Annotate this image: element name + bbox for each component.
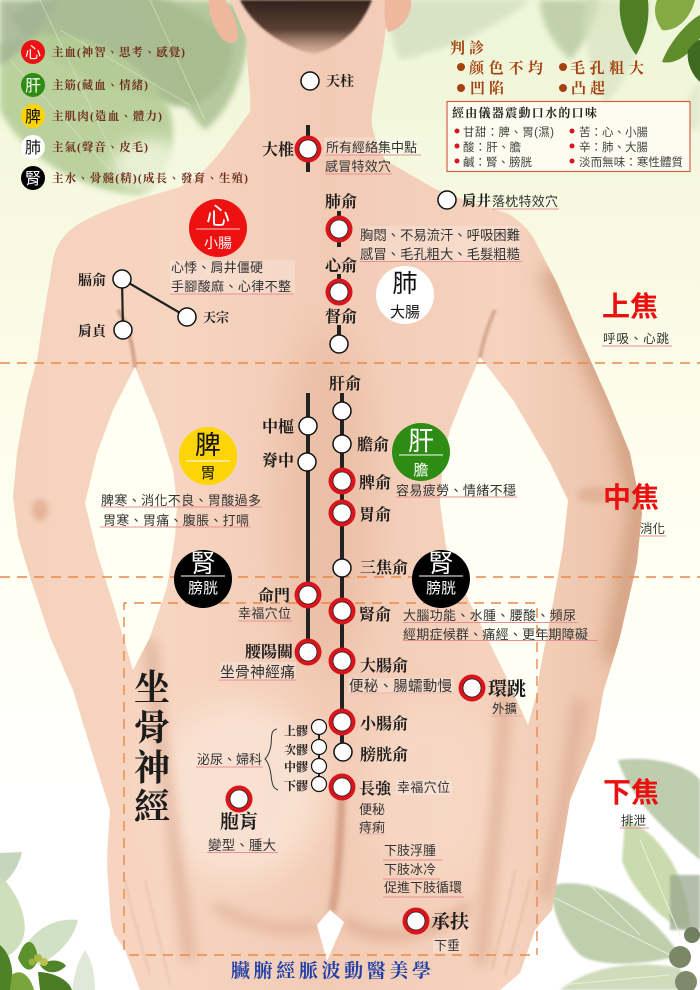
point: Feishu: 肺俞 <box>325 192 357 211</box>
point: Jianjing: 落枕特效穴 <box>492 194 558 209</box>
text: Dazhui notes: 感冒特效穴 <box>325 159 391 174</box>
sacral points: 下髎 <box>284 778 308 793</box>
point: Tianzhu: 天柱 <box>326 73 354 90</box>
text: Changqiang notes: 便秘 <box>359 802 385 817</box>
saliva taste box: 鹹：腎、膀胱 <box>463 155 532 169</box>
saliva taste box: 淡而無味：寒性體質 <box>579 155 683 169</box>
text: heart notes <box>170 260 295 294</box>
text: spleen notes <box>100 493 262 528</box>
text: spleen notes: 脾寒、消化不良、胃酸過多 <box>101 493 261 508</box>
point: Weishu: 胃俞 <box>359 505 391 524</box>
sacral points <box>284 720 326 793</box>
point: Jianzhen <box>78 321 132 340</box>
organ badge: lung / large intestine: 大腸 <box>390 301 420 322</box>
point: Pishu <box>328 468 391 494</box>
diagnosis list: 颜色不均 <box>469 59 543 77</box>
point: Ganshu: 肝俞 <box>329 374 361 393</box>
organ badge: heart / small intestine: 心 <box>206 196 230 231</box>
point: Jianjing <box>438 191 559 210</box>
organ badge: liver / gallbladder <box>392 421 450 481</box>
text: Dazhui notes <box>324 137 421 174</box>
saliva taste box: 苦：心、小腸 <box>579 126 648 139</box>
organ badge: heart / small intestine <box>189 196 247 257</box>
upper jiao label: 呼吸、心跳 <box>603 332 669 346</box>
text: Yaoyangguan note: 坐骨神經痛 <box>220 664 295 681</box>
point: Weishu <box>328 500 391 526</box>
organ badge: spleen / stomach: 胃 <box>200 462 216 483</box>
point: Geshu: 膈俞 <box>78 272 106 289</box>
middle jiao label <box>603 482 666 536</box>
point: Mingmen <box>258 582 322 608</box>
point: Yaoyangguan: 腰陽關 <box>245 643 293 661</box>
point: Pishu: 脾俞 <box>359 473 391 492</box>
text: Dachangshu note: 便秘、腸蠕動慢 <box>349 678 452 695</box>
point: Sanjiaoshu <box>333 558 408 577</box>
bracket: sacral points <box>265 729 278 790</box>
text: lower limb notes: 下肢冰冷 <box>384 862 436 877</box>
diagnosis list: 凸起 <box>571 79 605 97</box>
arm gaps <box>85 357 568 961</box>
point: Baohuang <box>220 786 258 833</box>
diagnosis list <box>450 39 644 97</box>
organ badge: kidney / bladder right <box>412 544 470 608</box>
leaves: bottom left <box>0 852 95 990</box>
text: lower limb notes: 下肢浮腫 <box>384 843 436 858</box>
saliva taste box: 甘甜：脾、胃(濕) <box>463 125 554 139</box>
text: Shenshu notes: 經期症候群、痛經、更年期障礙 <box>403 627 588 642</box>
acupoints: middle back <box>100 374 598 681</box>
point: Xiaochangshu <box>328 708 408 736</box>
diagnosis list: 判診 <box>450 39 484 57</box>
point: Dazhui: 大椎 <box>262 140 294 159</box>
point: Xinshu: 心俞 <box>325 256 357 275</box>
point: Dachangshu <box>328 648 408 675</box>
point: Shenshu: 腎俞 <box>359 605 391 624</box>
text: Changqiang notes: 痔痢 <box>359 820 385 835</box>
text: Feishu notes: 胸悶、不易流汗、呼吸困難 <box>360 228 520 243</box>
point: Huantiao <box>458 674 527 716</box>
point: Feishu <box>325 192 357 242</box>
organ badge: heart / small intestine: 小腸 <box>204 233 232 253</box>
point: Dazhui <box>262 136 322 162</box>
point: Danshu <box>333 435 389 454</box>
sciatic nerve vertical heading: 神 <box>134 748 170 788</box>
text: Feishu notes <box>360 226 522 262</box>
text: Shenshu notes <box>403 608 598 642</box>
fingers: right hand <box>492 870 530 975</box>
text: lower limb notes <box>383 843 464 897</box>
point: Ganshu <box>329 374 361 420</box>
organ badge: lung / large intestine <box>376 264 434 324</box>
text: heart notes: 心悸、肩井僵硬 <box>171 260 263 275</box>
legend row: liver: 主筋(藏血、情緒) <box>52 78 148 92</box>
point: Geshu <box>78 270 131 289</box>
text: Mingmen note: 幸福穴位 <box>238 606 291 621</box>
legend row: liver: 肝 <box>25 72 41 96</box>
point: Sanjiaoshu: 三焦俞 <box>360 558 408 577</box>
acupoints: neck and upper back <box>78 72 559 353</box>
point: Dachangshu: 大腸俞 <box>360 656 408 675</box>
sciatic nerve vertical heading: 經 <box>134 787 170 827</box>
point: Chengfu: 承扶 <box>431 911 469 933</box>
organ badge: lung / large intestine: 肺 <box>392 264 418 300</box>
legend row: spleen: 主肌肉(造血、體力) <box>52 109 162 123</box>
sciatic nerve vertical heading: 坐 <box>134 668 171 708</box>
point: Huantiao: 外擴 <box>492 701 517 716</box>
legend row: heart: 心 <box>25 39 41 63</box>
meridian lines <box>122 125 342 745</box>
legend row: lung: 主氣(聲音、皮毛) <box>52 140 148 154</box>
sacral points: 次髎 <box>284 742 308 757</box>
acupoints: lower back and buttocks <box>196 648 527 953</box>
point: Zhongshu <box>262 417 317 436</box>
point: Mingmen: 命門 <box>258 586 290 605</box>
saliva taste box <box>447 102 690 172</box>
legend row: kidney: 腎 <box>25 165 41 189</box>
organ badge: liver / gallbladder: 肝 <box>408 421 434 458</box>
diagnosis list: 毛孔粗大 <box>570 59 644 77</box>
point: Xiaochangshu: 小腸俞 <box>360 714 408 733</box>
point: Shenshu <box>328 598 391 624</box>
point: Baohuang: 胞肓 <box>220 810 258 833</box>
legend row: spleen <box>21 103 162 128</box>
organ badge: kidney / bladder left: 膀胱 <box>188 577 218 598</box>
lower jiao label: 排泄 <box>621 814 647 828</box>
shading: back centre <box>275 330 375 670</box>
middle jiao label: 中焦 <box>603 482 659 513</box>
lower jiao label <box>603 777 659 828</box>
footer title: 臟腑經脈波動醫美學 <box>231 960 431 982</box>
saliva taste box: 酸：肝、膽 <box>463 140 522 154</box>
point: Jizhong <box>262 451 316 471</box>
legend row: kidney <box>21 165 248 190</box>
point: Changqiang: 長強 <box>359 780 393 798</box>
point: Danshu: 膽俞 <box>357 435 389 454</box>
upper jiao label: 上焦 <box>602 291 658 322</box>
hair <box>240 0 372 54</box>
legend: five organs <box>21 39 248 190</box>
sciatic nerve vertical heading <box>134 668 171 827</box>
text: Dazhui notes: 所有經絡集中點 <box>326 140 417 155</box>
point: Pangguangshu: 膀胱俞 <box>360 745 408 764</box>
text: Baohuang note: 變型、腫大 <box>208 838 276 853</box>
text: liver notes: 容易疲勞、情緒不穩 <box>396 483 516 498</box>
point: Chengfu <box>402 908 469 934</box>
point: Tianzong <box>178 308 230 326</box>
legend row: kidney: 主水、骨髓(精)(成長、發育、生殖) <box>52 171 248 185</box>
text: Shenshu notes: 大腦功能、水腫、腰酸、頻尿 <box>403 608 576 623</box>
text: Changqiang notes <box>359 780 452 835</box>
point: Pangguangshu <box>334 743 408 764</box>
point: Xinshu <box>325 256 357 306</box>
organ badge: spleen / stomach <box>179 425 237 485</box>
point: Tianzong: 天宗 <box>203 310 230 325</box>
ears <box>209 0 411 43</box>
organ badge: kidney / bladder left <box>174 544 232 608</box>
legend row: spleen: 脾 <box>25 103 41 127</box>
legend row: liver <box>21 72 148 97</box>
sciatic nerve vertical heading: 骨 <box>134 708 170 748</box>
upper jiao label <box>602 291 672 346</box>
organ badge: spleen / stomach: 脾 <box>195 425 221 462</box>
fingers: left hand <box>125 880 170 985</box>
legend row: lung <box>21 134 148 159</box>
text: Changqiang notes: 幸福穴位 <box>397 780 450 795</box>
legend row: lung: 肺 <box>25 134 41 158</box>
organ badge: kidney / bladder right: 腎 <box>428 544 454 580</box>
lower jiao label: 下焦 <box>603 777 659 808</box>
point: Changqiang <box>328 774 393 800</box>
leaves: bottom right <box>552 759 700 990</box>
organ badge: kidney / bladder right: 膀胱 <box>426 577 456 598</box>
leaves: top left <box>0 0 250 195</box>
text: spleen notes: 胃寒、胃痛、腹脹、打嗝 <box>103 513 249 528</box>
legend row: heart <box>21 39 185 64</box>
point: Tianzhu <box>301 72 354 90</box>
middle jiao label: 消化 <box>640 522 665 536</box>
point: Jianjing: 肩井 <box>462 192 491 210</box>
point: Yaoyangguan <box>245 638 322 666</box>
organ badge: kidney / bladder left: 腎 <box>190 544 216 580</box>
point: Huantiao: 環跳 <box>488 678 527 700</box>
zone dashed lines <box>0 363 700 955</box>
sacral points: 中髎 <box>284 759 308 774</box>
organ badge: liver / gallbladder: 膽 <box>413 459 429 480</box>
text: Feishu notes: 感冒、毛孔粗大、毛髮粗糙 <box>360 246 521 262</box>
saliva taste box: 經由儀器震動口水的口味 <box>452 105 597 120</box>
text: heart notes: 手腳酸麻、心律不整 <box>171 279 291 294</box>
text: Chengfu note: 下垂 <box>434 938 460 953</box>
sacral points: 上髎 <box>284 723 308 738</box>
leaves: top right <box>389 0 700 130</box>
saliva taste box: 辛：肺、大腸 <box>579 140 648 154</box>
point: Dushu: 督俞 <box>325 307 357 326</box>
legend row: heart: 主血(神智、思考、感覺) <box>52 45 185 59</box>
diagnosis list: 凹陷 <box>470 79 504 97</box>
text: lower limb notes: 促進下肢循環 <box>384 880 462 895</box>
point: Jianzhen: 肩貞 <box>78 323 108 340</box>
point: Jizhong: 脊中 <box>262 451 294 470</box>
point: Zhongshu: 中樞 <box>262 417 294 436</box>
point: Dushu <box>325 307 357 353</box>
text: urinary and gynecology: 泌尿、婦科 <box>197 752 262 767</box>
